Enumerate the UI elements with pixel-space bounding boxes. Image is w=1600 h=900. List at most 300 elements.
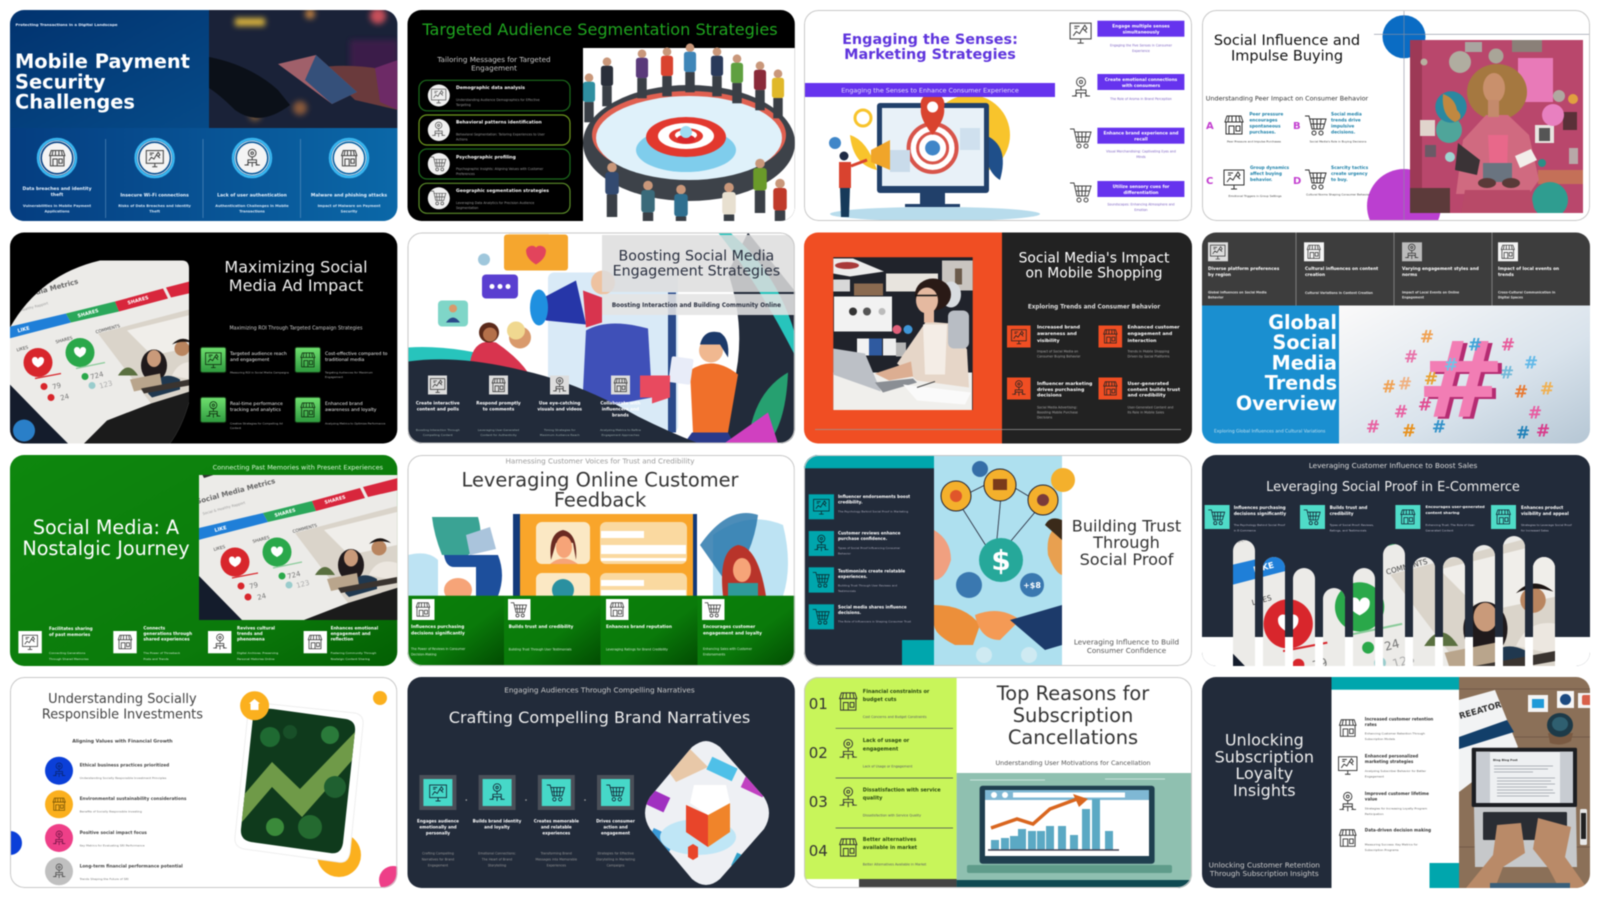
title: Challenges [15, 90, 135, 114]
title: Social Proof [1080, 550, 1174, 569]
item: trust [1300, 505, 1374, 532]
item: interactive content: Boosting Interaction Through [416, 428, 460, 432]
header: Connecting Past Memories with Present Experiences [213, 464, 384, 472]
band [804, 83, 1055, 97]
item: brand experience: Enhance brand experience and [1104, 130, 1178, 136]
subtitle: Leveraging Influence to Build [1074, 638, 1179, 646]
item: engage multiple senses [1070, 21, 1184, 53]
item: brand awareness [1007, 324, 1081, 358]
item: influencer endorsements [809, 494, 910, 519]
title: Leveraging Social Proof in E-Commerce [1266, 480, 1520, 495]
item: visibility [1491, 505, 1573, 532]
item: loyalty: engagement and loyalty [703, 630, 762, 636]
title: Unlocking [1225, 730, 1304, 750]
item: engages audience: personally [426, 830, 450, 836]
panel: Maximizing Social Media Ad Impact [9, 232, 398, 444]
item: malware and phishing: Security [341, 210, 358, 214]
panel: Understanding Socially Responsible Investments [0, 677, 407, 894]
item: brand experience: recall [1134, 136, 1148, 142]
image: hashtags: # [1421, 322, 1509, 444]
item: personalized marketing: Analyzing Subscriber Behavior for Better [1365, 769, 1427, 773]
item: engage multiple senses: Experience [1132, 49, 1150, 53]
item: lack of authentication [215, 139, 289, 214]
item: data breaches: Applications [44, 210, 70, 214]
item: data-driven decisions: Measuring Success: Key Metrics for [1365, 842, 1419, 846]
item: real-time: Creative Strategies for Compelling Ad [230, 422, 283, 426]
item: platform preferences: by region [1208, 272, 1231, 278]
subtitle: Through Subscription Insights [1209, 869, 1319, 878]
item: social shares [809, 604, 912, 629]
item C: affect buying [1250, 171, 1282, 177]
item: emotional connections: with consumers [1122, 83, 1161, 89]
item 01: Cost Concerns and Budget Constraints [863, 715, 927, 719]
item: data-driven decisions [1339, 828, 1431, 852]
item: customer reviews: purchase confidence. [838, 536, 888, 541]
item: brand experience: Minds [1136, 155, 1146, 159]
item: psychographic: Psychographic profiling [456, 154, 516, 160]
item: engages audience: Crafting Compelling [422, 852, 454, 856]
item: social shares: Social media shares influence [838, 604, 907, 610]
item: demographic [419, 80, 570, 111]
item: testimonials [809, 567, 905, 593]
item D: D [1293, 176, 1301, 187]
item: interactive content: Create interactive [416, 400, 460, 406]
item 01: 01 [809, 695, 828, 713]
item: consumer action: Campaigns [607, 864, 625, 868]
item: memorable: Messages into Memorable [535, 858, 577, 862]
item A: Peer pressure [1249, 112, 1283, 118]
item: eye-catching visuals: Maximum Audience Reach [540, 433, 580, 437]
item: cultural trends: Revives cultural [237, 626, 276, 630]
item: cultural trends: Digital Archives: Preserving [237, 651, 278, 655]
item: psychographic: Preferences [456, 172, 475, 176]
item: sensory cues: Utilize sensory cues for [1113, 184, 1170, 190]
title: Crafting Compelling Brand Narratives [449, 708, 750, 727]
title panel: Boosting Interaction and Building Community Online [612, 303, 781, 309]
illustration: monitor with target [829, 93, 1040, 221]
item: purchasing decisions: Influences purchasing [411, 624, 464, 630]
item: personalized marketing: marketing strategies [1365, 759, 1414, 764]
item D: Cultural Norms Shaping Consumer Behavior [1306, 192, 1371, 196]
item B: trends drive [1331, 118, 1361, 124]
item: local events: Impact of local events on [1498, 266, 1559, 272]
item: insecure wi-fi: Insecure Wi-Fi connections [120, 192, 189, 198]
item: engagement styles: norms [1402, 272, 1418, 278]
item: consumer action [596, 775, 635, 868]
item: geographic: Geographic segmentation strategies [456, 188, 549, 194]
item: brand awareness: Consumer Buying Behavior [1037, 354, 1081, 358]
item: influencer marketing: Social Media Advertising: [1037, 406, 1077, 410]
item: user-generated content [1098, 378, 1181, 414]
photo: laptop on wooden desk: REEATOR [1458, 700, 1503, 722]
item: behavioral [419, 115, 570, 145]
item: malware and phishing: Malware and phishing attacks [311, 192, 387, 198]
item: lifetime value [1339, 791, 1429, 816]
item: connects generations [113, 626, 192, 661]
item: visibility: for Increased Sales [1521, 528, 1549, 532]
item 04: 04 [809, 842, 828, 860]
title: Nostalgic Journey [22, 537, 190, 560]
image: hashtags: # [1524, 354, 1538, 374]
image: hashtags: # [1417, 320, 1505, 442]
title: Engaging the Senses: [842, 32, 1018, 48]
item: interactive content: Compelling Content [423, 433, 454, 437]
item: customer reviews [809, 530, 901, 556]
item 02: engagement [863, 746, 899, 752]
item: platform preferences: Diverse platform preferences [1208, 266, 1280, 272]
item 04: available in market [863, 845, 918, 851]
item: demographic: Understanding Audience Demographics for Effective [456, 98, 540, 102]
item: geographic: Leveraging Data Analytics for Precision Audience [456, 201, 534, 205]
item: influencer marketing: Decisions [1037, 416, 1053, 420]
item: platform preferences [1208, 242, 1280, 300]
title: Social [1273, 331, 1337, 354]
item: retention rates: Enhancing Customer Retention Through [1365, 732, 1425, 736]
item: testimonials: Testimonials [837, 589, 856, 593]
item: visibility: Enhances product [1521, 505, 1563, 510]
item: cost-effective: Targeting Audiences for Maximum [324, 370, 373, 374]
item: loyalty: Endorsements [703, 652, 726, 656]
item: trust: credibility [1330, 511, 1354, 516]
item: platform preferences: Behavior [1208, 296, 1224, 300]
item: interactive content [416, 376, 460, 437]
item: geographic [419, 183, 570, 213]
item: behavioral: Behavioral Segmentation: Tailoring Experiences to User [456, 132, 545, 136]
title: Top Reasons for [996, 682, 1149, 705]
item: emotional connections: The Role of Aroma in Brand Perception [1109, 97, 1172, 101]
item: purchasing decisions [1205, 505, 1286, 532]
item: sharing memories: Through Shared Memories [48, 657, 89, 661]
panel: Engaging the Senses [804, 10, 1194, 221]
item: retention rates: Increased customer retention [1365, 716, 1433, 722]
item: engage multiple senses: simultaneously [1123, 30, 1160, 36]
item: influencer endorsements: Influencer endorsements boost [838, 494, 910, 499]
title: Building Trust [1072, 516, 1181, 536]
item: user-generated content: Its Role in Mobile Sales [1128, 410, 1164, 414]
title: Marketing Strategies [844, 47, 1016, 63]
item: psychographic [419, 149, 570, 179]
item: lifetime value: Improved customer lifetime [1365, 791, 1429, 796]
item: customer engagement: Driven by Social Platforms [1128, 354, 1170, 358]
item A: A [1206, 121, 1214, 132]
item: enhanced brand: awareness and loyalty [325, 407, 377, 413]
image: hashtags: # [1420, 328, 1434, 348]
panel: Leveraging Online Customer Feedback [407, 455, 797, 667]
item: collaborate: Collaborate with [600, 400, 640, 406]
item 03: 03 [809, 793, 828, 811]
image: hashtags: # [1382, 378, 1396, 398]
item: data-driven decisions: Data-driven decision making [1365, 828, 1431, 832]
item: engage multiple senses: Engage multiple senses [1112, 24, 1170, 30]
panel: Boosting Social Media Engagement [407, 232, 797, 444]
panel: Unlocking Subscription Loyalty Insights [1202, 677, 1592, 888]
item: consumer action: action and [603, 824, 628, 830]
item C: Group dynamics [1250, 165, 1290, 171]
item: brand identity: Emotional Connections: [478, 852, 516, 856]
item: customer engagement: Trends in Mobile Shopping [1126, 350, 1169, 354]
item: platform preferences: Global Influences on Social Media [1208, 290, 1267, 294]
item: sensory cues: Soundscapes: Enhancing Atmosphere and [1107, 202, 1175, 206]
item: ethical practices: Understanding Socially Responsible Investment Principles [80, 776, 167, 780]
subtitle: Harnessing Customer Voices for Trust and Credibility [506, 456, 695, 466]
item D [1293, 165, 1371, 196]
item: customer engagement: Enhanced customer [1128, 324, 1180, 330]
item: sensory cues [1070, 181, 1184, 212]
item: targeted reach [200, 347, 289, 374]
item: user-generated content: content builds trust [1128, 387, 1181, 393]
item: purchasing decisions: The Power of Reviews in Consumer [410, 647, 466, 651]
item: cultural trends: Personal Histories Online [237, 657, 275, 661]
item B [1293, 112, 1367, 144]
item: connects generations: Posts and Trends [143, 657, 169, 661]
item B: decisions. [1331, 130, 1356, 136]
item: data breaches [22, 139, 92, 214]
item: engagement styles: Engagement [1402, 296, 1424, 300]
item: cultural influences: Cultural influences on content [1305, 266, 1378, 272]
item: memorable [534, 775, 579, 868]
item: malware and phishing: Impact of Malware on Payment [318, 204, 381, 208]
item: consumer action: Storytelling in Marketing [596, 858, 635, 862]
image: hashtags: # [1402, 422, 1416, 442]
item: environmental: Benefits of Socially Responsible Investing [80, 810, 142, 814]
photo: woman shopping on laptop [833, 256, 974, 412]
item: user-generated content: and credibility [1128, 392, 1166, 398]
title: Social Media's Impact [1019, 250, 1170, 266]
photo: social media metrics [9, 260, 190, 444]
item 03: Dissatisfaction with Service Quality [863, 814, 921, 818]
item: local events: Cross-Cultural Communication in [1498, 290, 1555, 294]
item: local events: Digital Spaces [1498, 296, 1523, 300]
item: reputation: Enhances brand reputation [606, 624, 672, 630]
item: insecure wi-fi [118, 139, 192, 214]
item: collaborate: influencers and [602, 406, 639, 412]
item: real-time: Content [230, 426, 242, 430]
item: insecure wi-fi: Theft [149, 210, 160, 214]
illustration: feedback cards [408, 513, 796, 603]
item: demographic: Targeting [455, 103, 471, 107]
panel: Social Influence and Impulse Buying [1202, 10, 1592, 243]
item: user-generated content: User-Generated Content and [1128, 406, 1173, 410]
title: Global [1268, 311, 1337, 334]
item A: spontaneous [1249, 124, 1281, 130]
item: behavioral: Behavioral patterns identification [456, 120, 542, 126]
item: purchasing decisions: Influences purchasing [1234, 505, 1286, 510]
title: Leveraging Online Customer [461, 468, 739, 492]
item: malware and phishing [311, 139, 387, 214]
item: influencer marketing: Influencer marketing [1037, 381, 1092, 387]
illustration: network and handshake: +$8 [1023, 581, 1041, 590]
item 02: 02 [809, 744, 828, 762]
image: hashtags: # [1536, 422, 1550, 442]
photo: laptop on wooden desk [1458, 677, 1592, 888]
item: engages audience: emotionally and [419, 824, 457, 830]
item: sensory cues: differentiation [1123, 190, 1159, 196]
title panel: Boosting Social Media [619, 248, 774, 264]
item: social shares: decisions. [838, 610, 862, 615]
item: influencer marketing [1007, 378, 1092, 420]
title: Trends [1265, 372, 1337, 395]
item: brand identity: Builds brand identity [473, 818, 522, 824]
item: purchasing decisions: The Psychology Behind Social Proof [1233, 523, 1286, 527]
illustration: network and handshake [934, 455, 1075, 666]
item: trust: Ratings, and Testimonials [1330, 528, 1367, 532]
item: emotional engagement: Fostering Community Through [331, 651, 376, 655]
item: brand awareness: Increased brand [1037, 324, 1080, 330]
speech bubble [640, 376, 670, 404]
item: brand experience: Visual Merchandising: Captivating Eyes and [1106, 150, 1176, 154]
photo: leaves arrow [235, 702, 363, 862]
icon: home badge [240, 691, 269, 720]
item C [1206, 165, 1290, 198]
item: long-term performance [45, 857, 183, 885]
item 02 [809, 738, 913, 768]
item: consumer action: Drives consumer [596, 818, 635, 824]
item: brand awareness: Impact of Social Media on [1037, 350, 1078, 354]
item: ethical practices [45, 757, 169, 785]
item: customer reviews: Behavior [838, 552, 852, 556]
item: long-term performance: Long-term financial performance potential [80, 864, 183, 870]
divider line [815, 428, 1181, 430]
item: connects generations: shared experiences [143, 636, 190, 642]
image: hashtags [1339, 306, 1592, 444]
item: data breaches: Vulnerabilities in Mobile Payment [23, 204, 91, 208]
item: emotional engagement [304, 626, 379, 661]
item: respond promptly: Leveraging User-Generated [478, 428, 519, 432]
item: user-generated [1395, 504, 1485, 532]
item: visibility: visibility and appeal [1521, 511, 1569, 516]
item: real-time: tracking and analytics [230, 407, 281, 413]
item: cost-effective: Cost-effective compared to [325, 351, 388, 357]
item: memorable: Transforming Brand [540, 852, 572, 856]
subheading: Maximizing ROI Through Targeted Campaign Strategies [230, 326, 363, 332]
item: lifetime value: Participation [1365, 812, 1384, 816]
title: Impulse Buying [1231, 48, 1343, 64]
item: cultural influences: creation [1305, 272, 1325, 278]
photo: paying by phone at terminal [209, 8, 398, 128]
image: hashtags: # [1404, 348, 1418, 368]
item: brand identity: and loyalty [484, 824, 510, 830]
item: retention rates [1339, 716, 1433, 741]
item 03: quality [863, 796, 883, 802]
item B: Social Media's Role in Buying Decisions [1310, 140, 1367, 144]
item: lack of authentication: Lack of user authentication [217, 192, 287, 198]
item A: purchases. [1249, 130, 1276, 136]
item: customer reviews: Customer reviews enhance [838, 530, 901, 536]
item: data-driven decisions: Subscription Programs [1365, 848, 1399, 852]
illustration: laptop with growth chart [957, 773, 1195, 888]
subheading: Understanding Peer Impact on Consumer Behavior [1206, 94, 1369, 102]
image: hashtags: # [1398, 374, 1412, 394]
panel: Top Reasons for Subscription Cancellations [804, 677, 1195, 888]
item: trust: Builds trust and [1330, 505, 1367, 510]
subtitle: Exploring Global Influences and Cultural Variations [1214, 428, 1326, 434]
item: influencer endorsements: credibility. [838, 500, 863, 504]
item: real-time: Real-time performance [230, 401, 283, 407]
panel: Social Media's Impact on Mobile Shopping [804, 232, 1194, 444]
item: real-time [200, 397, 283, 430]
title: Responsible Investments [42, 708, 203, 722]
illustration: network and handshake: $ [991, 544, 1011, 577]
panel: Social Media: A Nostalgic Journey [10, 435, 439, 666]
title: Insights [1233, 781, 1296, 800]
item: respond promptly: to comments [483, 406, 515, 412]
image: hashtags: # [1514, 382, 1528, 402]
title: Security [15, 70, 106, 94]
item: purchasing decisions [410, 599, 466, 656]
item: eye-catching visuals: Timing Strategies for [543, 428, 576, 432]
title panel: Engagement Strategies [613, 264, 780, 280]
item: memorable: and relatable [541, 824, 572, 830]
item: influencer endorsements: The Psychology Behind Social Proof in Marketing [837, 510, 908, 514]
item: targeted reach: Measuring ROI in Social Media Campaigns [230, 370, 289, 374]
item: memorable: Experiences [547, 864, 566, 868]
header: Leveraging Customer Influence to Boost Sales [1309, 461, 1478, 470]
title: Subscription [1215, 748, 1314, 766]
item: influencer marketing: Boosting Mobile Purchase [1037, 410, 1078, 414]
image: hashtags: # [1540, 380, 1554, 400]
item: brand awareness: visibility [1037, 338, 1060, 344]
item: user-generated: Encourages user-generated [1426, 504, 1485, 509]
item: reputation: Leveraging Ratings for Brand Credibility [606, 648, 668, 652]
subheading: Tailoring Messages for Targeted [436, 55, 551, 64]
item: consumer action: engagement [601, 830, 630, 836]
item: cultural influences: Cultural Variations in Content Creation [1305, 291, 1373, 295]
item B: B [1293, 121, 1301, 132]
item: social impact: Key Metrics for Evaluating SRI Performance [80, 843, 145, 847]
item C: C [1206, 176, 1213, 187]
subtitle: Unlocking Customer Retention [1209, 860, 1320, 870]
item: social impact [45, 824, 147, 852]
subheading: Understanding User Motivations for Cancellation [995, 759, 1151, 767]
item: cost-effective: Engagement [325, 375, 344, 379]
image: hashtags: # [1528, 404, 1542, 424]
title: Social Influence and [1214, 33, 1360, 49]
item: interactive content: content and polls [417, 406, 459, 412]
image: hashtags: # [1444, 356, 1458, 376]
title: Loyalty [1235, 764, 1293, 783]
item: retention rates: Subscription Models [1365, 737, 1395, 741]
title: Through [1092, 533, 1160, 552]
item: emotional engagement: Nostalgic Content Sharing [331, 657, 370, 661]
item: engages audience: Engages audience [417, 818, 459, 824]
item 02: Lack of usage or [863, 738, 910, 744]
item: emotional connections [1072, 74, 1184, 101]
image: hashtags: # [1516, 424, 1530, 444]
item: trust: Builds trust and credibility [509, 624, 574, 630]
subheading: Engagement [471, 64, 517, 73]
item 01: Financial constraints or [863, 689, 930, 695]
title: Targeted Audience Segmentation Strategies [421, 20, 778, 39]
item: collaborate: brands [612, 412, 629, 418]
image: colourful box [640, 741, 775, 886]
item 02: Lack of Usage or Engagement [863, 764, 913, 768]
item: loyalty [702, 599, 762, 656]
item: sharing memories: of past memories [49, 632, 91, 637]
title: Feedback [554, 488, 647, 512]
item: personalized marketing: Enhanced personalized [1365, 754, 1418, 758]
image: hashtags: # [1424, 370, 1438, 390]
item: long-term performance: Trends Shaping the Future of SRI [79, 877, 129, 881]
photo: woman with tablet [1410, 40, 1583, 218]
item: personalized marketing [1339, 754, 1427, 778]
header: Engaging Audiences Through Compelling Narratives [504, 686, 695, 694]
item C: behavior. [1250, 177, 1273, 183]
item D: Scarcity tactics [1331, 165, 1369, 171]
image: hashtags: # [1366, 418, 1380, 438]
title: on Mobile Shopping [1026, 266, 1162, 282]
item B: impulsive [1331, 124, 1354, 130]
item: behavioral: Actions [456, 138, 468, 142]
